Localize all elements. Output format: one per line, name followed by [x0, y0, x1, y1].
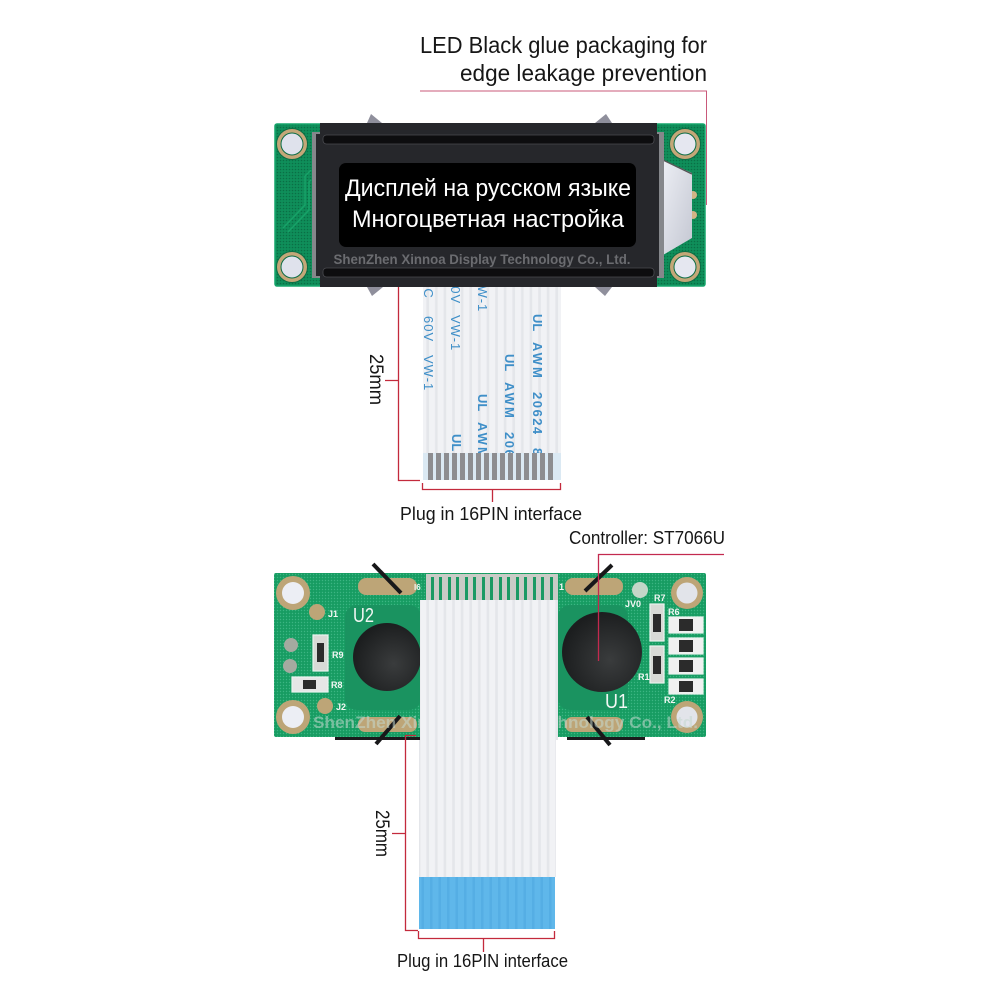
ribbon cable print — [421, 276, 545, 460]
ribbon cable print: 60V — [448, 278, 463, 304]
frame grooves — [323, 135, 654, 277]
solder pads — [309, 578, 648, 732]
silkscreen labels: R2 — [664, 695, 676, 705]
ribbon cable print: UL — [449, 434, 464, 451]
heading: LED black glue packaging — [420, 32, 707, 86]
label: Plug in 16PIN interface back: Plug in 16PIN interface — [397, 951, 568, 971]
ribbon cable print: 20624 — [530, 392, 545, 436]
backlight tab — [689, 191, 697, 199]
silkscreen labels: U2 — [353, 605, 374, 627]
callout line: controller — [598, 554, 724, 661]
dimension: 25mm back: 25mm — [371, 810, 392, 857]
metal tabs: front — [367, 114, 612, 296]
watermark front: ShenZhen Xinnoa Display Technology Co., Ltd. — [334, 251, 630, 267]
ribbon cable print: DC — [421, 278, 436, 299]
ribbon cable print: UL — [530, 314, 545, 331]
ribbon cable print: VW-1 — [448, 315, 463, 351]
LCD module: front view — [275, 123, 705, 287]
ribbon cable print: AWM — [530, 342, 545, 380]
silkscreen labels: J2 — [336, 702, 346, 712]
chip blob U1 — [562, 612, 642, 692]
silkscreen labels: R7 — [654, 593, 666, 603]
label: Controller: Controller: ST7066U — [569, 528, 725, 548]
callout line: glue packaging — [420, 91, 706, 205]
display text: Многоцветная настройка — [352, 206, 624, 233]
display window — [339, 163, 636, 247]
ribbon contacts — [423, 453, 561, 480]
ribbon cable print: 60V — [421, 316, 436, 342]
label: Plug in 16PIN interface front: Plug in 16PIN interface — [400, 503, 582, 524]
ribbon cable print: 8 — [530, 448, 545, 455]
chip blob U2 — [353, 623, 421, 691]
ribbon cable print: 206 — [502, 432, 517, 458]
LCD module: back view — [274, 564, 706, 745]
bracket: 16PIN back — [418, 931, 554, 952]
blue stiffener — [419, 877, 555, 929]
ribbon cable print: VW-1 — [421, 355, 436, 391]
ribbon cable: back view — [419, 600, 558, 929]
PCB front — [275, 124, 705, 286]
dimension: 25mm back — [371, 736, 418, 930]
ribbon cable print: UL — [475, 394, 490, 411]
display text — [345, 175, 631, 233]
silkscreen labels — [328, 582, 680, 713]
ribbon cable: front view — [421, 276, 561, 480]
metal frame edge — [312, 132, 664, 278]
silkscreen labels: R1 — [638, 672, 650, 682]
ribbon cable print: VW-1 — [475, 276, 490, 312]
silkscreen labels: JV0 — [625, 599, 641, 609]
watermark back: ShenZhen Xinnoa Display Technology Co., Ltd. — [313, 713, 698, 732]
dimension: 25mm front — [365, 287, 420, 480]
bracket: 16PIN front — [422, 483, 560, 502]
silkscreen labels: 1 — [559, 582, 564, 592]
pin header — [426, 574, 558, 600]
mounting holes back — [276, 576, 703, 734]
PCB back — [274, 573, 706, 737]
silkscreen labels: I6 — [414, 583, 421, 592]
silkscreen labels: U1 — [605, 691, 628, 713]
display text: Дисплей на русском языке — [345, 175, 631, 202]
dimension: 25mm front: 25mm — [365, 354, 386, 405]
metal clips — [373, 564, 612, 745]
heading: LED black glue packaging: edge leakage prevention — [460, 60, 707, 86]
ribbon cable print: AWM — [475, 422, 490, 460]
silkscreen labels: R9 — [332, 650, 344, 660]
resistors — [292, 604, 703, 694]
silkscreen labels: R8 — [331, 680, 343, 690]
ribbon cable print: AWM — [502, 382, 517, 420]
mounting holes front — [276, 128, 700, 282]
silkscreen labels: J1 — [328, 609, 338, 619]
heading: LED black glue packaging: LED Black glue packaging for — [420, 32, 707, 58]
ribbon cable print: UL — [502, 354, 517, 371]
silkscreen labels: R6 — [668, 607, 680, 617]
back rails — [335, 573, 645, 740]
black frame — [316, 123, 659, 287]
